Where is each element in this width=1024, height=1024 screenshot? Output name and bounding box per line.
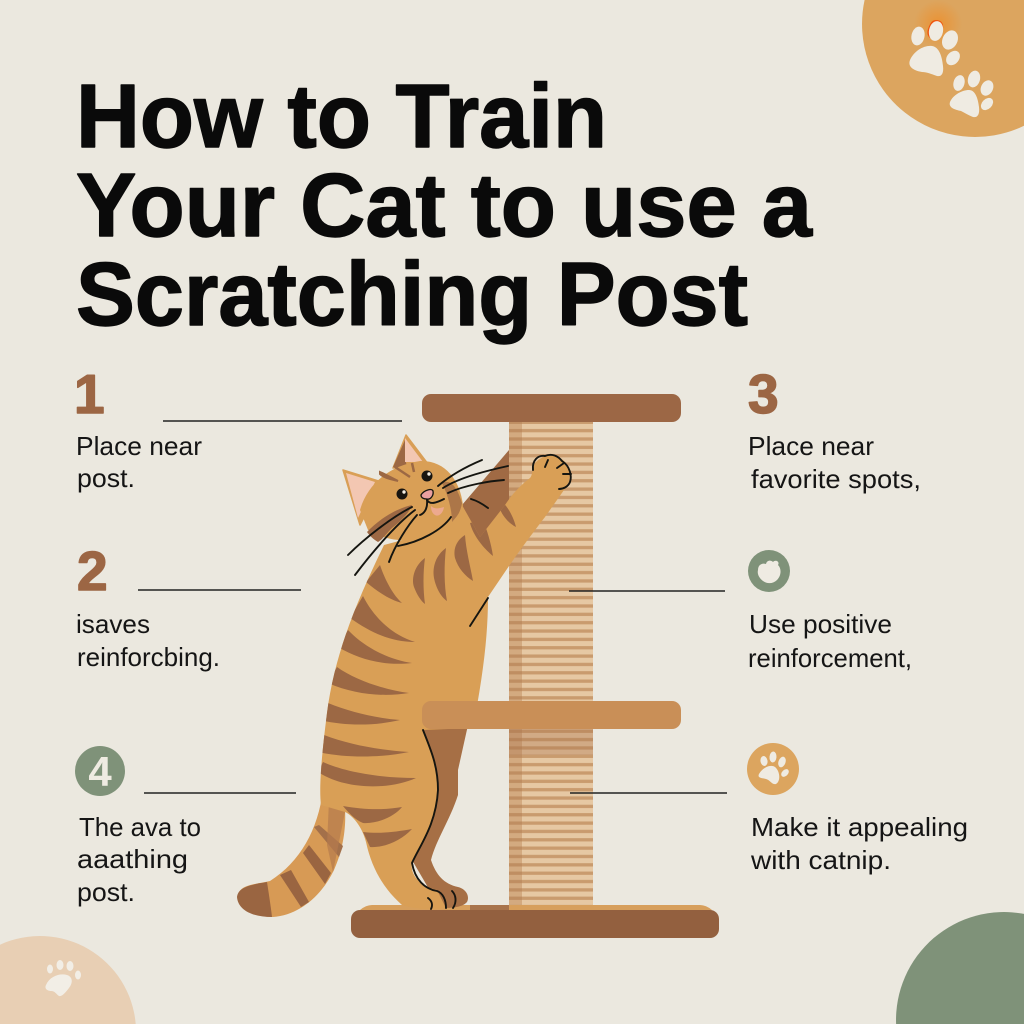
step 4: text (77, 812, 201, 907)
step 3: text (748, 431, 921, 494)
cat whiskers (348, 460, 508, 575)
cat head (360, 461, 463, 540)
step 5: text: reinforcement, (748, 643, 912, 673)
title: Your Cat to use a (76, 156, 813, 256)
middle platform (422, 701, 681, 729)
step 4: badge: 4 (88, 748, 112, 795)
step 1: text: post. (77, 463, 135, 493)
cat back arm (462, 450, 509, 560)
cat body (320, 456, 570, 909)
step 2: text: reinforcbing. (77, 642, 220, 672)
step 4: text: post. (77, 877, 135, 907)
cat ear right (393, 435, 428, 475)
cat chin line (398, 517, 451, 546)
cat stripes (318, 498, 516, 847)
connector lines (138, 421, 727, 793)
base platform (351, 905, 719, 938)
title: How to Train (76, 67, 607, 167)
cat face markings (367, 463, 462, 542)
step 1: number: 1 (74, 363, 105, 425)
title: Scratching Post (76, 245, 748, 345)
step 5: text (748, 609, 912, 673)
step 6: text: Make it appealing (751, 812, 968, 842)
step 3: text: favorite spots, (751, 464, 921, 494)
cat paw toes (533, 455, 571, 489)
cat (237, 435, 571, 917)
icon: orange paw badge (747, 743, 799, 795)
step 4: badge (75, 746, 125, 796)
icon: large paw (909, 20, 963, 76)
step 1: text: Place near (76, 431, 202, 461)
cat body lines (412, 499, 488, 909)
icon: small paw (950, 69, 996, 117)
decorative circle: bottom left with paw (0, 936, 136, 1024)
step 1: text (76, 431, 202, 493)
cat eyes (396, 470, 432, 500)
post column (509, 422, 593, 908)
step 5: text: Use positive (749, 609, 892, 639)
top platform (422, 394, 681, 422)
decorative circle: top right with paws (862, 0, 1024, 137)
decorative circle: bottom right (896, 912, 1024, 1024)
step 4: text: aaathing (77, 844, 188, 874)
title (76, 67, 813, 345)
step 3: number: 3 (748, 363, 779, 425)
step 4: text: The ava to (79, 812, 201, 842)
cat back leg (412, 725, 468, 908)
icon: green badge (748, 550, 790, 592)
step 2: number: 2 (77, 540, 108, 602)
step 6: text (750, 812, 968, 875)
step 2: text (76, 609, 220, 672)
step 3: text: Place near (748, 431, 874, 461)
scratching post (351, 394, 719, 938)
cat nose and mouth (420, 490, 444, 516)
step 2: text: isaves (76, 609, 150, 639)
cat ear left (343, 470, 382, 525)
cat tail (237, 790, 345, 917)
step 6: text: with catnip. (750, 845, 891, 875)
